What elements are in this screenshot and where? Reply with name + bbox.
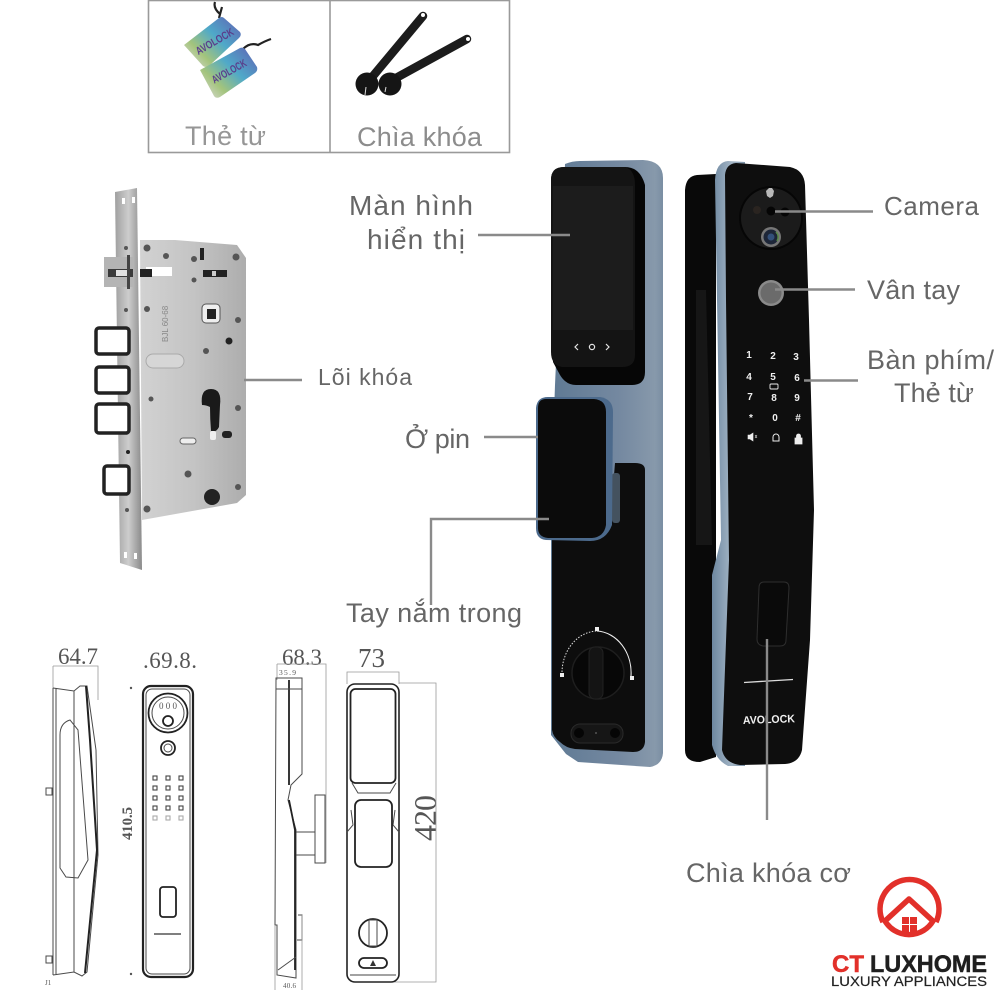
brand text: AVOLOCK <box>743 713 795 727</box>
blue edge <box>712 161 745 766</box>
screen unit <box>551 167 645 385</box>
keypad: 2 <box>770 351 776 362</box>
keypad: 5 <box>770 372 776 383</box>
callout: Màn hình hiển thị: hiển thị <box>367 224 465 255</box>
dimension drawing: side view B: 35.9 <box>279 668 296 677</box>
illustration: mortise lock core <box>96 188 246 570</box>
callout: Chìa khóa cơ: Chìa khóa cơ <box>686 858 851 888</box>
dimension drawing: side view B: 40.6 <box>283 982 296 990</box>
dimension drawing: front view A <box>120 648 197 977</box>
icon: key cards <box>184 2 271 98</box>
indicator line <box>744 680 793 682</box>
product: lock front view <box>685 161 814 766</box>
keypad: 3 <box>793 352 799 363</box>
dimension drawing: side view A <box>45 644 98 987</box>
callout: Vân tay: Vân tay <box>867 275 960 305</box>
logo: CT Luxhome <box>831 880 987 989</box>
keypad <box>746 350 802 444</box>
black lower panel <box>552 463 645 752</box>
face plate <box>115 188 142 570</box>
label: Thẻ từ: Thẻ từ <box>185 121 266 151</box>
camera <box>739 186 803 250</box>
dimension 68.3: 68.3 <box>282 645 322 670</box>
logo name CT: CT <box>832 951 864 978</box>
key slot cover <box>757 582 789 646</box>
keypad: 6 <box>794 373 800 384</box>
callout: Màn hình hiển thị: Màn hình <box>349 190 473 221</box>
icon: mechanical keys <box>356 13 470 96</box>
callout: Lõi khóa: Lõi khóa <box>318 364 412 390</box>
dimension 410.5: 410.5 <box>120 807 136 840</box>
dimension 420: 420 <box>407 795 443 841</box>
keypad: 9 <box>794 393 800 404</box>
keypad: 4 <box>746 372 752 383</box>
callout: Tay nắm trong <box>346 519 549 628</box>
dimension 69.8: .69.8. <box>143 648 197 673</box>
callout: Bàn phím / Thẻ từ: Bàn phím/ <box>867 345 994 375</box>
rear handle <box>685 174 716 762</box>
touch buttons <box>575 344 609 350</box>
bolts <box>96 328 129 494</box>
callout: Ở pin <box>405 422 538 454</box>
inner handle battery compartment <box>536 397 620 541</box>
dimension drawing: back view B <box>347 643 443 982</box>
fingerprint sensor <box>758 280 784 306</box>
case details <box>140 244 241 512</box>
product: lock back view <box>536 160 663 767</box>
callout: Camera: Camera <box>884 191 980 221</box>
callout: Tay nắm trong: Tay nắm trong <box>346 597 522 628</box>
dimension drawing: side view A: J1 <box>45 979 52 987</box>
icon: key cards: AVOLOCK <box>194 26 236 58</box>
panel: accessories <box>148 0 510 152</box>
keypad: * <box>749 413 753 424</box>
dimension 73: 73 <box>358 643 385 673</box>
keypad: # <box>795 413 801 424</box>
callout: Màn hình hiển thị <box>349 190 570 255</box>
blue body <box>551 160 663 767</box>
keypad: 8 <box>771 393 777 404</box>
keypad: 7 <box>747 392 753 403</box>
lock case <box>140 240 246 520</box>
icon: key cards: AVOLOCK <box>210 57 249 86</box>
logo icon <box>880 880 939 935</box>
callout: Bàn phím / Thẻ từ: Thẻ từ <box>894 378 974 408</box>
dimension drawing: front view A: 000 <box>159 701 178 711</box>
callout: Ở pin: Ở pin <box>405 422 470 454</box>
display <box>553 186 633 330</box>
thumb turn <box>560 627 634 743</box>
logo tagline: LUXURY APPLIANCES <box>831 974 987 989</box>
logo name LUXHOME: LUXHOME <box>870 951 987 978</box>
black face <box>722 163 814 765</box>
label: Chìa khóa: Chìa khóa <box>357 122 483 152</box>
keypad: 1 <box>746 350 752 361</box>
case details: BJL 60-68 <box>161 305 170 342</box>
keypad: 0 <box>772 413 778 424</box>
dimension drawing: side view B <box>275 645 326 990</box>
latch <box>104 255 133 289</box>
dimension 64.7: 64.7 <box>58 644 98 669</box>
callout: Bàn phím / Thẻ từ <box>804 345 994 408</box>
